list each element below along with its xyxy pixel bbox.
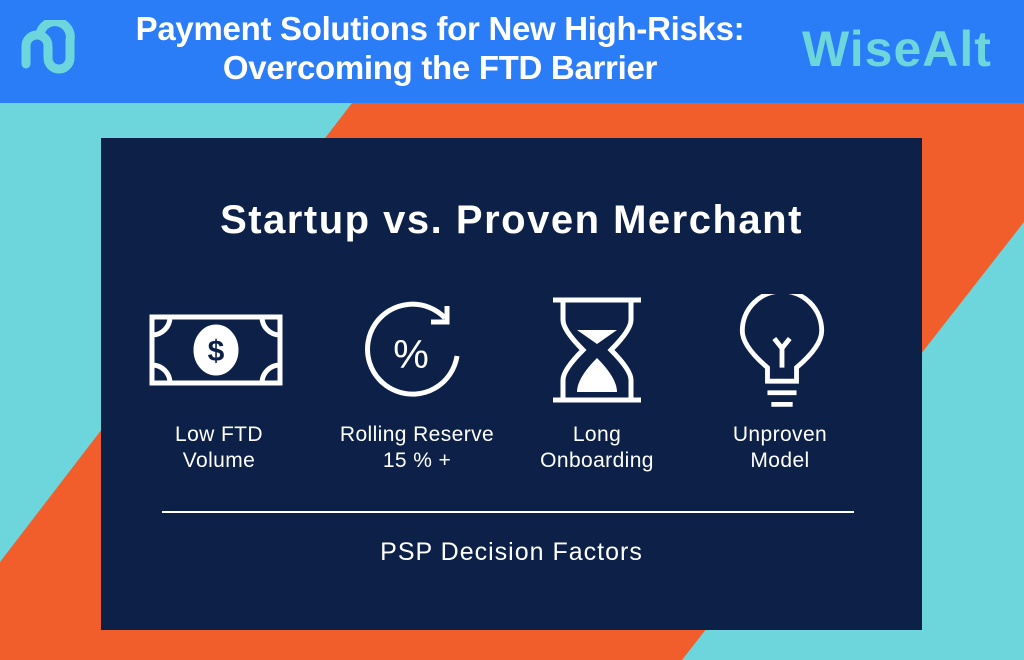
footer text: PSP Decision Factors xyxy=(380,538,643,566)
label: unproven model: Unproven xyxy=(733,423,827,446)
heading: Startup vs. Proven Merchant xyxy=(220,198,803,242)
label: low FTD: Volume xyxy=(183,449,255,472)
title xyxy=(136,10,744,86)
label: rolling reserve: 15 % + xyxy=(383,449,451,472)
label: long onboarding: Onboarding xyxy=(540,449,654,472)
label: unproven model xyxy=(733,423,827,472)
label: low FTD xyxy=(175,423,263,472)
label: long onboarding: Long xyxy=(573,423,621,446)
icon: rolling reserve: % xyxy=(393,333,429,377)
icon: hourglass xyxy=(553,298,641,402)
label: rolling reserve: Rolling Reserve xyxy=(340,423,494,446)
label: unproven model: Model xyxy=(750,449,810,472)
label: long onboarding xyxy=(540,423,654,472)
icon: lightbulb xyxy=(740,294,824,407)
label: low FTD: Low FTD xyxy=(175,423,263,446)
brand logo: WiseAlt xyxy=(802,21,992,77)
icon: money xyxy=(150,314,282,386)
icon: money: $ xyxy=(208,335,225,368)
title: Overcoming the FTD Barrier xyxy=(223,49,657,86)
label: rolling reserve xyxy=(340,423,494,472)
logo icon xyxy=(22,20,75,74)
header bar xyxy=(0,0,1024,103)
title: Payment Solutions for New High-Risks: xyxy=(136,10,744,47)
icon: rolling reserve xyxy=(365,302,460,397)
panel: main xyxy=(101,138,922,630)
